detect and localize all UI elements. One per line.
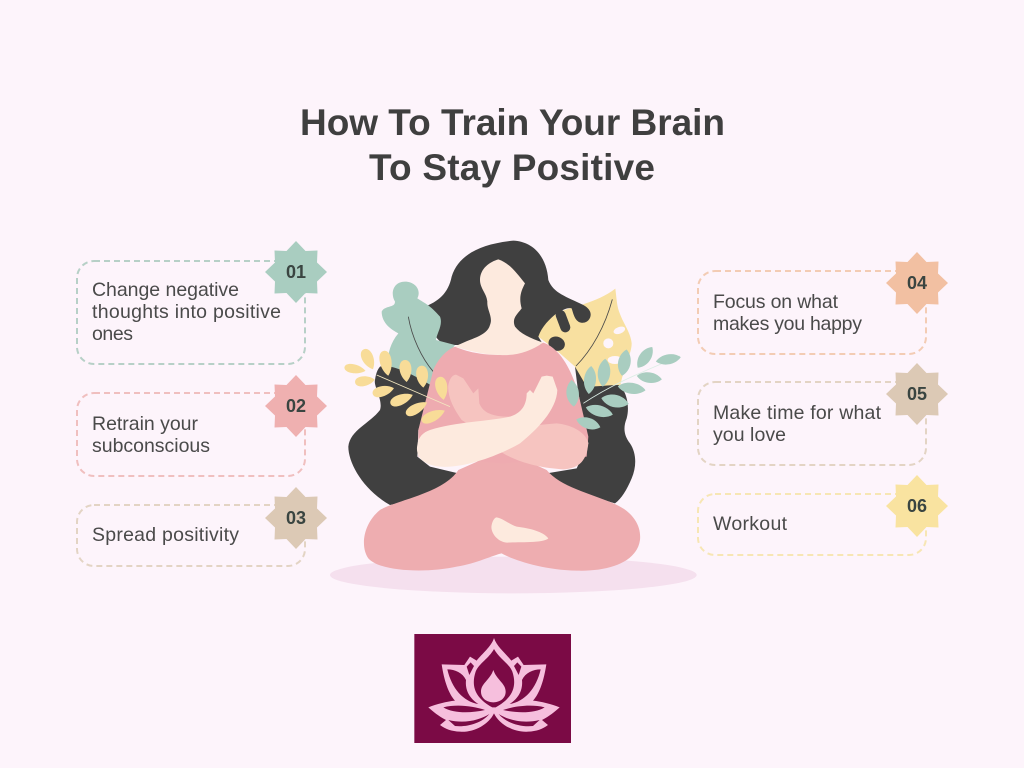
teal sprig xyxy=(565,344,682,432)
panel: tip 04 xyxy=(698,252,948,354)
lotus centre drop xyxy=(481,670,506,702)
badge 02 xyxy=(265,375,327,437)
badge 03 xyxy=(265,487,327,549)
logo: lotus xyxy=(414,634,571,743)
text: tip 01 xyxy=(92,279,281,345)
panel: tip 06 xyxy=(698,475,948,555)
ground shadow xyxy=(330,557,697,593)
upper hair xyxy=(423,241,591,353)
text: tip 04: Focus on what xyxy=(713,291,839,313)
panel: tip 02 xyxy=(77,375,327,476)
text: tip 01: ones xyxy=(92,323,133,345)
text: tip 05: you love xyxy=(713,424,786,446)
badge 01: 01 xyxy=(286,262,306,282)
title: To Stay Positive xyxy=(369,147,655,188)
text: tip 03: Spread positivity xyxy=(92,524,239,546)
lotus right half xyxy=(494,638,560,732)
back arm xyxy=(448,375,588,469)
text: tip 04: makes you happy xyxy=(713,313,862,335)
text: tip 05: Make time for what xyxy=(713,402,882,424)
text: tip 06: Workout xyxy=(713,513,788,535)
illustration: meditating woman xyxy=(330,241,697,593)
lotus flower xyxy=(428,638,560,732)
text: tip 01: thoughts into positive xyxy=(92,301,281,323)
badge 02: 02 xyxy=(286,396,306,416)
badge 05: 05 xyxy=(907,384,927,404)
text: tip 02 xyxy=(92,413,210,457)
title: How To Train Your Brain xyxy=(300,102,725,143)
badge 06: 06 xyxy=(907,496,927,516)
panel: tip 05 xyxy=(698,363,948,465)
badge 04: 04 xyxy=(907,273,927,293)
shirt xyxy=(418,343,588,463)
text: tip 04 xyxy=(713,291,862,335)
panel: tip 03 xyxy=(77,487,327,566)
logo background xyxy=(414,634,571,743)
text: tip 02: subconscious xyxy=(92,435,210,457)
lotus centre cavity xyxy=(474,649,514,707)
panel: tip 01 xyxy=(77,241,327,364)
badge 03: 03 xyxy=(286,508,306,528)
face and neck xyxy=(455,259,543,355)
badge 06 xyxy=(886,475,948,537)
front arm xyxy=(417,376,557,467)
badge 05 xyxy=(886,363,948,425)
text: tip 01: Change negative xyxy=(92,279,239,301)
lotus left half xyxy=(428,638,494,732)
foot xyxy=(491,517,548,543)
badge 01 xyxy=(265,241,327,303)
yellow sprig xyxy=(344,347,450,426)
pants xyxy=(364,450,640,571)
yellow monstera leaf xyxy=(538,289,632,387)
text: tip 02: Retrain your xyxy=(92,413,198,435)
badge 04 xyxy=(886,252,948,314)
lower hair xyxy=(348,366,635,505)
text: tip 05 xyxy=(713,402,882,446)
title xyxy=(300,102,725,188)
teal monstera leaf xyxy=(382,282,455,387)
